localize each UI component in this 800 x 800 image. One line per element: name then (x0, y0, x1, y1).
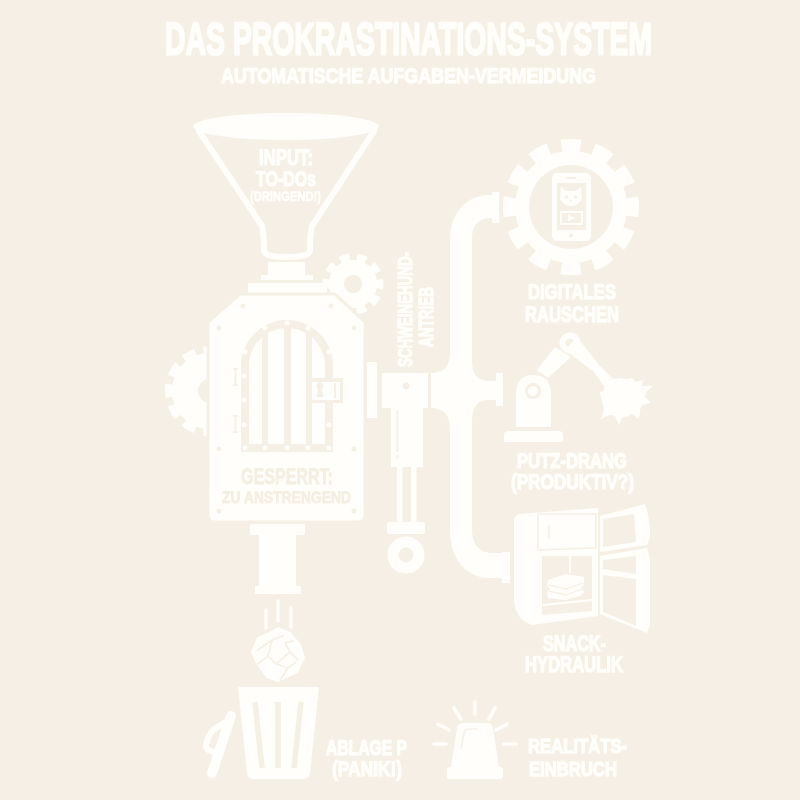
funnel rim (193, 113, 379, 140)
putz-drang label: PUTZ-DRANG (517, 450, 627, 473)
lower door (600, 548, 650, 633)
large gear with phone (510, 146, 632, 268)
falling motion lines (266, 601, 291, 628)
pipe flange top (492, 192, 499, 223)
drive connector and hydraulic cylinder (367, 362, 428, 568)
digitales rauschen label: DIGITALES (528, 281, 616, 304)
siren icon (434, 702, 517, 779)
pipe flange middle (496, 373, 503, 406)
gesperrt label (222, 464, 351, 507)
input label: INPUT: (259, 145, 313, 170)
fridge cabinet (514, 508, 598, 625)
barred door (233, 320, 343, 452)
siren rays (434, 702, 517, 744)
lower compartment (542, 556, 592, 615)
feather duster (600, 378, 653, 425)
open fridge with sandwich (514, 504, 650, 633)
input label: TO-DOs (256, 168, 316, 191)
body rivets (216, 304, 356, 514)
siren dome (451, 723, 499, 767)
robot elbow (562, 336, 578, 350)
left gear (165, 346, 206, 436)
snack-hydraulik label: HYDRAULIK (525, 652, 623, 677)
phone (552, 173, 591, 241)
upper door (600, 504, 650, 552)
robot upper arm (537, 347, 571, 378)
robot base (504, 431, 563, 442)
trash label: ABLAGE P (326, 737, 407, 760)
siren base (447, 767, 503, 779)
branching pipe (431, 192, 510, 583)
machine neck and plate (248, 262, 327, 293)
padlock with keyhole (308, 378, 343, 403)
siren label (528, 735, 627, 781)
trash label: (PANIK!) (332, 758, 402, 781)
digitales rauschen label: RAUSCHEN (525, 302, 619, 327)
video player (561, 212, 582, 224)
snack-hydraulik label: SNACK- (543, 631, 606, 656)
putz-drang label (511, 450, 634, 494)
subtitle: AUTOMATISCHE AUFGABEN-VERMEIDUNG (221, 64, 596, 88)
cat face (560, 187, 582, 206)
putz-drang label: (PRODUKTIV?) (511, 471, 634, 494)
door rivets (242, 320, 332, 450)
siren label: REALITÄTS- (528, 735, 627, 758)
drive label (395, 252, 438, 367)
drive label: SCHWEINEHUND- (395, 252, 417, 367)
snack-hydraulik label (525, 631, 623, 677)
trash can (206, 687, 319, 779)
machine: funnel with input label (193, 113, 379, 257)
robot body (516, 375, 551, 427)
hinges (233, 368, 238, 433)
funnel outline (199, 131, 374, 257)
sandwich (547, 574, 584, 600)
small gear top right (326, 258, 380, 310)
trash can lid (206, 716, 231, 773)
freezer compartment (538, 514, 596, 550)
trash can slots (255, 702, 301, 768)
crumpled paper ball (252, 628, 304, 681)
robot arm with feather duster (504, 336, 653, 442)
input label: (DRINGEND!) (250, 188, 321, 204)
input label (250, 145, 321, 204)
siren label: EINBRUCH (529, 759, 617, 781)
gesperrt label: ZU ANSTRENGEND (222, 488, 351, 507)
output pipe (250, 524, 305, 594)
drive label: ANTRIEB (416, 287, 438, 347)
gesperrt label: GESPERRT: (241, 464, 333, 489)
pipe flange bottom (502, 552, 510, 583)
robot forearm (565, 337, 612, 386)
trash label (326, 737, 407, 781)
machine body (208, 294, 365, 522)
digitales rauschen label (525, 281, 619, 327)
